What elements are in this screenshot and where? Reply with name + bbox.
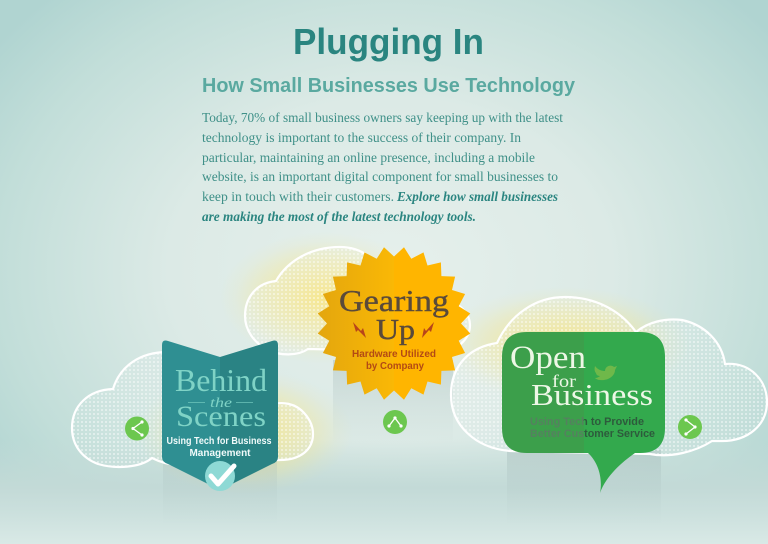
badge: Behind the Scenes <box>160 338 280 492</box>
subtitle: Hardware Utilized by Company: Hardware Utilized <box>352 348 436 360</box>
subtitle: Hardware Utilized by Company: by Company <box>366 360 424 372</box>
icon: twitter bird <box>595 366 617 380</box>
heading: Open for Business: for <box>552 371 576 391</box>
button: left <box>125 416 149 440</box>
cloud: left <box>72 352 313 467</box>
subtitle: Using Tech for Business Management: Using Tech for Business <box>166 435 272 447</box>
heading: Open for Business: Business <box>531 377 653 412</box>
subtitle: How Small Businesses Use Technology <box>202 75 576 97</box>
intro paragraph: Explore how small businesses <box>396 189 558 204</box>
subtitle: Using Tech to Provide Better Customer Service <box>530 416 655 440</box>
heading: Behind the Scenes: Behind <box>175 362 267 398</box>
button: center <box>383 410 407 434</box>
intro paragraph: technology is important to the success of their company. In <box>202 130 521 145</box>
icon: lightning bolts <box>353 322 434 338</box>
heading: Gearing Up: Gearing <box>339 283 449 318</box>
yellow glow behind clouds <box>137 232 690 494</box>
heading: Behind the Scenes: Scenes <box>176 400 266 433</box>
intro paragraph: particular, maintaining an online presence, including a mobile <box>202 150 535 165</box>
intro paragraph: Today, 70% of small business owners say keeping up with the latest <box>202 110 563 125</box>
subtitle: Hardware Utilized by Company <box>352 348 436 372</box>
reflections under badges <box>163 360 661 525</box>
heading: Open for Business <box>510 340 653 412</box>
intro paragraph: website, is an important digital component for small businesses to <box>202 169 558 184</box>
badge: Gearing Up <box>316 245 472 403</box>
icon: check mark <box>205 461 235 491</box>
cloud: right <box>451 297 767 455</box>
title: Plugging In <box>293 21 484 62</box>
subtitle: Using Tech for Business Management <box>166 435 272 459</box>
heading: Behind the Scenes <box>175 362 267 433</box>
subtitle: Using Tech for Business Management: Management <box>190 447 251 459</box>
cloud: center <box>245 247 470 354</box>
subtitle: Using Tech to Provide Better Customer Service: Using Tech to Provide <box>530 416 644 428</box>
intro paragraph: keep in touch with their customers. <box>202 189 394 204</box>
heading: Gearing Up: Up <box>376 314 415 346</box>
heading: Behind the Scenes: the <box>210 396 232 411</box>
intro paragraph <box>202 110 563 224</box>
badge: Open for Business <box>500 330 668 495</box>
intro paragraph: are making the most of the latest technology tools. <box>202 209 476 224</box>
subtitle: Using Tech to Provide Better Customer Service: Better Customer Service <box>530 428 655 440</box>
heading: Gearing Up <box>339 283 449 346</box>
button: right <box>678 415 702 439</box>
heading: Open for Business: Open <box>510 340 586 376</box>
